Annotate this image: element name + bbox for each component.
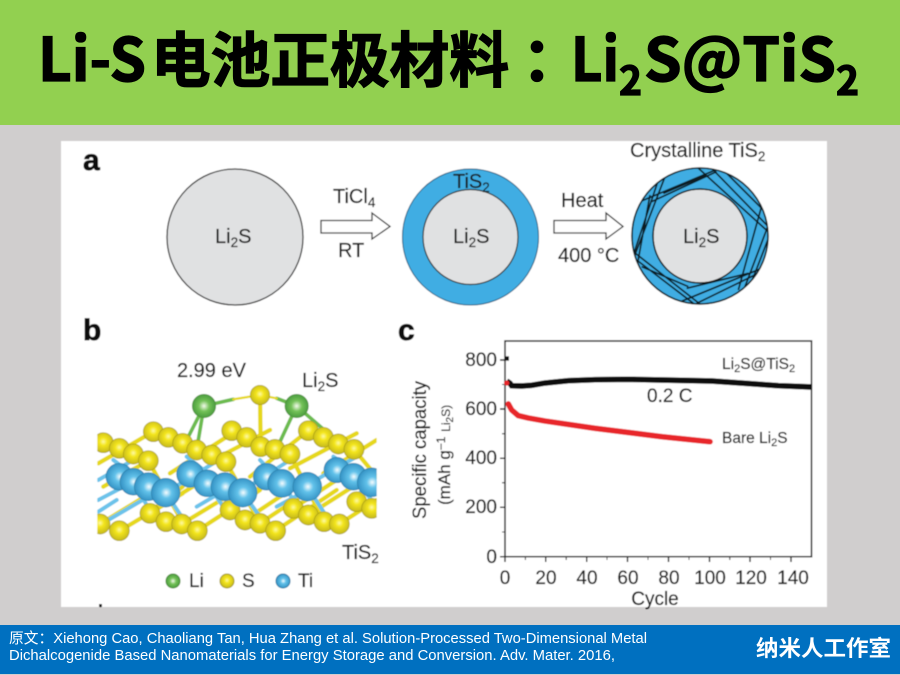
arrow: Heat 400 C: Heat (561, 190, 604, 212)
y axis title: −1 (434, 436, 448, 450)
x tick labels: 40 (576, 568, 598, 589)
Li2S label: S (325, 370, 338, 392)
Li2S bare particle (167, 169, 303, 305)
label Li2S@TiS2: Li (722, 356, 734, 373)
Li2S coated with TiS2: 2 (482, 180, 490, 195)
TiS2 label: TiS (342, 542, 371, 564)
y tick labels: 400 (465, 448, 497, 469)
y tick labels: 0 (486, 547, 497, 568)
label bare Li2S: S (777, 430, 788, 447)
cropped mark (99, 604, 102, 607)
label bare Li2S: 2 (771, 437, 777, 449)
Li2S bare particle: Li (215, 226, 231, 248)
panel a: synthesis schematic (83, 140, 772, 307)
arrow: TiCl4 RT: TiCl (333, 186, 368, 208)
y tick labels: 200 (465, 497, 497, 518)
legend: Li (189, 571, 204, 592)
citation: Dichalcogenide Based Nanomaterials for Energy Storage and Conversion. Adv. Mater. 2016, (9, 647, 615, 664)
title banner (0, 0, 900, 125)
Li2S bare particle: 2 (231, 235, 238, 250)
Li2S coated with TiS2: TiS (453, 171, 482, 193)
TiS2 lattice with adsorbed Li2S (90, 385, 386, 541)
panel c: capacity chart (99, 314, 812, 610)
citation (9, 630, 647, 664)
label c: c (398, 314, 415, 347)
arrow: Heat 400 C (554, 190, 623, 267)
Li2S bare particle: S (238, 226, 251, 248)
crystalline TiS2 particle: Li (683, 226, 699, 248)
Li2S coated with TiS2: Li (453, 226, 469, 248)
Li2S coated with TiS2: 2 (469, 235, 476, 250)
crystalline TiS2 particle: S (706, 226, 719, 248)
title (38, 12, 859, 107)
x tick labels: 20 (535, 568, 557, 589)
energy label: 2.99 eV (177, 360, 247, 382)
y axis title: S) (439, 405, 453, 417)
x tick labels: 120 (735, 568, 767, 589)
label b: b (83, 314, 101, 347)
series: bare Li2S (504, 380, 710, 442)
y axis title: Specific capacity (410, 381, 431, 519)
label Li2S@TiS2: S@TiS (740, 356, 789, 373)
y axis title: Li (439, 422, 453, 432)
title: S@TiS (644, 12, 836, 99)
title: Li-S (38, 12, 146, 99)
x tick labels (500, 568, 809, 589)
label Li2S@TiS2: 2 (734, 363, 740, 375)
crystalline TiS2 particle: Crystalline TiS (630, 140, 758, 162)
Li2S label: Li (302, 370, 318, 392)
y tick labels: 800 (465, 350, 497, 371)
studio name: 纳米人工作室 (756, 636, 891, 661)
title: 2 (836, 49, 859, 107)
x tick labels: 140 (777, 568, 809, 589)
x tick labels: 80 (658, 568, 680, 589)
arrow: TiCl4 RT: 4 (368, 195, 376, 210)
citation: 原文：Xiehong Cao, Chaoliang Tan, Hua Zhang et al. Solution-Processed Two-Dimensional Metal (9, 630, 647, 647)
x tick labels: 100 (694, 568, 726, 589)
crystalline TiS2 particle: 2 (758, 149, 765, 164)
TiS2 label: 2 (371, 551, 379, 566)
label rate: 0.2 C (647, 386, 692, 407)
label a: a (83, 144, 100, 177)
y tick labels: 600 (465, 399, 497, 420)
y axis title: (mAh g (435, 450, 454, 505)
label bare Li2S: Bare Li (722, 430, 771, 447)
series: Li2S@TiS2 (505, 356, 812, 387)
legend: Ti (298, 571, 313, 592)
y tick labels (465, 350, 497, 568)
title: ： (522, 12, 582, 99)
crystalline TiS2 particle: 2 (699, 235, 706, 250)
x tick labels: 60 (617, 568, 639, 589)
title: 2 (619, 49, 642, 107)
panel b: atomic structure (83, 314, 386, 592)
crystalline TiS2 particle (630, 140, 772, 307)
arrow: TiCl4 RT (321, 186, 390, 262)
Li2S coated with TiS2: S (476, 226, 489, 248)
arrow: TiCl4 RT: RT (338, 240, 364, 262)
legend: S (242, 571, 255, 592)
arrow: Heat 400 C: 400 °C (558, 245, 619, 267)
label Li2S@TiS2: 2 (789, 363, 795, 375)
y axis title (410, 381, 456, 519)
x axis title: Cycle (631, 589, 679, 610)
plot axes (500, 341, 812, 562)
figure panel (61, 140, 827, 610)
y axis title: 2 (445, 416, 456, 422)
footer band (0, 625, 900, 674)
title: Li (571, 12, 619, 99)
Li2S coated with TiS2 (402, 169, 538, 305)
x tick labels: 0 (500, 568, 510, 589)
title: 电池正极材料 (151, 13, 509, 100)
Li2S label: 2 (318, 379, 325, 394)
legend (166, 571, 313, 592)
